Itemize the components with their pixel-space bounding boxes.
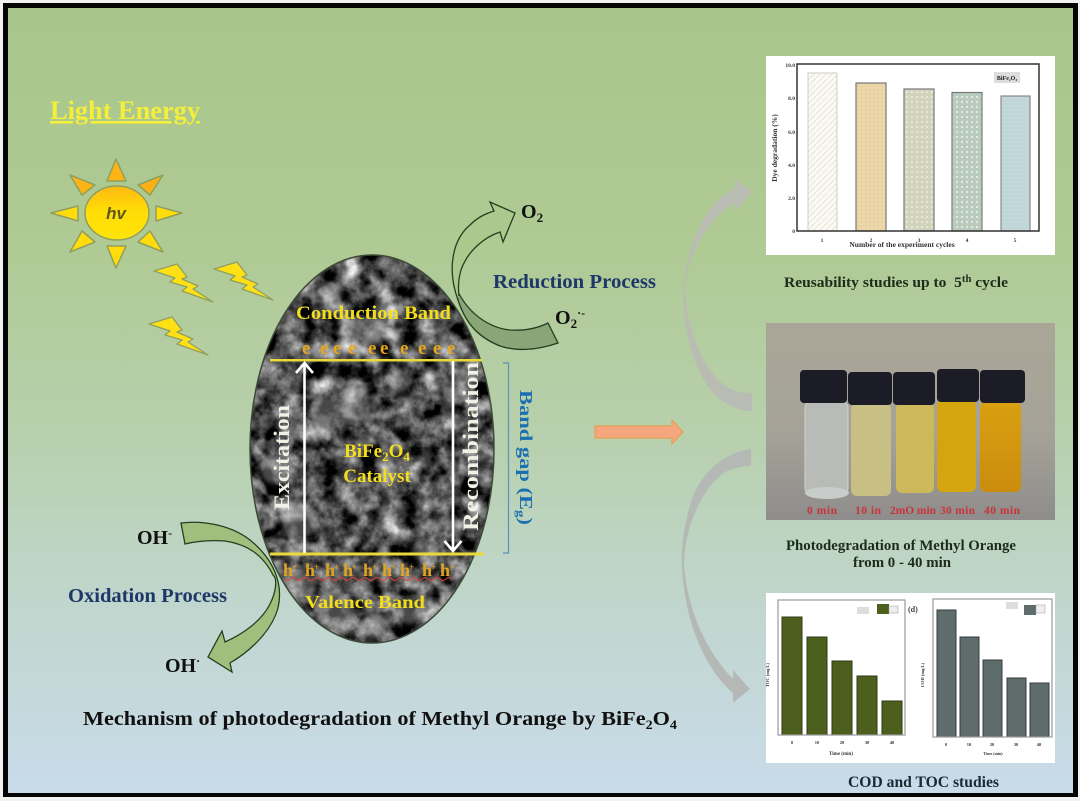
bar chart: dye degradation by cycle: Number of the experiment cycles	[849, 240, 955, 249]
bar chart: TOC: 40	[890, 740, 895, 745]
vial 40 min	[980, 370, 1025, 492]
label: BiFe2O4 Catalyst: 2	[382, 449, 389, 464]
electrons row: eeeeeeeeee	[302, 338, 455, 359]
caption: photodegradation	[786, 538, 1017, 571]
label: O2 radical: ·-	[577, 306, 585, 320]
bar chart: TOC: 10	[815, 740, 820, 745]
caption: reusability: th	[962, 274, 972, 285]
holes row: hhhhhhhhh	[283, 560, 450, 580]
vial 30 min	[937, 369, 979, 492]
bar chart: COD: 0	[945, 742, 948, 747]
bar chart: TOC: Time (min)	[829, 752, 853, 757]
caption: COD and TOC: COD and TOC studies	[848, 774, 999, 791]
icon: sun: hv	[106, 204, 127, 223]
panel: TOC and COD charts	[765, 593, 1055, 763]
label: O2: 2	[537, 210, 543, 225]
vial time labels: 2mO min	[890, 505, 937, 517]
caption: reusability: cycle	[971, 275, 1009, 291]
bar chart: dye degradation by cycle: Dye degradation (%)	[770, 114, 779, 182]
vial time labels: 30 min	[940, 505, 976, 517]
bar chart: dye degradation by cycle: 6.0	[788, 130, 795, 136]
arrow: grey to reusability chart	[683, 179, 752, 411]
caption: reusability: Reusability studies up to 5	[784, 275, 950, 291]
icon: sun	[51, 159, 182, 268]
conduction band line	[270, 359, 482, 362]
label: Oxidation Process: Oxidation Process	[68, 586, 227, 607]
bar chart: COD: 30	[1014, 742, 1019, 747]
icon: lightning bolt 1	[154, 264, 213, 302]
panel: reusability chart	[766, 56, 1055, 255]
label: BiFe2O4 Catalyst: O	[389, 441, 403, 462]
label: OH radical: OH	[165, 655, 196, 677]
label: Conduction Band: Conduction Band	[296, 304, 452, 324]
bar chart: dye degradation by cycle: 3	[918, 238, 921, 244]
icon: lightning bolt 3	[149, 317, 208, 355]
caption: photodegradation: Photodegradation of Methyl Orange	[786, 538, 1017, 554]
label: Band gap: Band gap (E	[516, 390, 536, 486]
bar chart: COD: Time (min)	[983, 751, 1003, 756]
label: OH radical: ·	[196, 654, 200, 668]
label: O2 radical: O	[555, 307, 571, 329]
arrow: recombination	[444, 361, 462, 551]
arrow: grey to COD TOC charts	[682, 449, 751, 703]
title: mechanism caption: O	[653, 708, 670, 730]
bar chart: dye degradation by cycle: 2	[870, 238, 873, 244]
bar chart: dye degradation by cycle: BiFe₂O₄	[997, 76, 1017, 82]
SEM micrograph oval	[250, 255, 495, 645]
holes row: +++++++++	[292, 562, 454, 572]
label: BiFe2O4 Catalyst	[343, 441, 411, 487]
bar chart: TOC: 30	[865, 740, 870, 745]
label: O2: O	[521, 201, 537, 223]
bar chart: TOC	[765, 600, 918, 757]
bar chart: TOC: TOC (mg/L)	[765, 662, 770, 687]
icon: lightning bolt 2	[214, 262, 273, 300]
title: mechanism caption: 4	[670, 717, 678, 732]
label: OH- top: -	[168, 526, 172, 540]
arrow: excitation	[296, 363, 313, 553]
title: mechanism caption: 2	[646, 717, 653, 732]
band gap bracket	[503, 363, 508, 553]
label: Band gap: g	[514, 510, 528, 518]
vial 10 min	[848, 372, 892, 496]
vial time labels: 0 min	[807, 505, 838, 517]
bar chart: TOC: 0	[791, 740, 794, 745]
arrow: reduction lower crescent	[458, 292, 558, 349]
bar chart: COD: 20	[990, 742, 995, 747]
heading: Light Energy: Light Energy	[50, 96, 200, 125]
vial 0 min	[800, 370, 849, 499]
vial 20 min	[893, 372, 935, 493]
bar chart: dye degradation by cycle: 1	[821, 238, 824, 244]
arrow: orange central	[595, 420, 683, 444]
bar chart: COD	[920, 599, 1052, 756]
arrow: reduction upper arrow to O2	[452, 202, 515, 300]
bar chart: COD: 10	[967, 742, 972, 747]
catalyst oval with band diagram	[250, 255, 495, 645]
label: Recombination: Recombination	[458, 362, 483, 531]
bar chart: TOC: 20	[840, 740, 845, 745]
bar chart: dye degradation by cycle: 0	[792, 229, 795, 235]
label: Valence Band: Valence Band	[305, 592, 425, 612]
label: Reduction Process: Reduction Process	[493, 272, 656, 293]
vial time labels: 10 in	[855, 505, 882, 517]
panel: vial photo	[766, 323, 1055, 520]
label: BiFe2O4 Catalyst: BiFe	[344, 441, 382, 462]
bar chart: dye degradation by cycle: 10.0	[785, 63, 795, 69]
arrow: oxidation	[181, 522, 280, 672]
vial time labels	[807, 505, 1021, 517]
bar chart: dye degradation by cycle: 5	[1014, 238, 1017, 244]
bar chart: dye degradation by cycle: 4.0	[788, 163, 795, 169]
label: BiFe2O4 Catalyst: Catalyst	[343, 466, 411, 487]
label: OH- top: OH	[137, 527, 168, 549]
bar chart: TOC: (d)	[908, 605, 918, 614]
label: Band gap: )	[515, 518, 536, 525]
label: O2 radical: 2	[571, 316, 577, 331]
caption: photodegradation: from 0 - 40 min	[853, 555, 951, 571]
bar chart: dye degradation by cycle: 8.0	[788, 96, 795, 102]
bar chart: COD: 40	[1037, 742, 1042, 747]
bar chart: dye degradation by cycle	[770, 63, 1039, 249]
bar chart: COD: COD (mg/L)	[920, 662, 925, 687]
valence band line	[270, 552, 484, 556]
bar chart: dye degradation by cycle: 2.0	[788, 196, 795, 202]
label: Excitation: Excitation	[269, 405, 294, 510]
label: BiFe2O4 Catalyst: 4	[403, 449, 410, 464]
bar chart: dye degradation by cycle: 4	[966, 238, 969, 244]
title: mechanism caption: Mechanism of photodegradation of Methyl Orange by BiFe	[83, 708, 602, 730]
vial time labels: 40 min	[984, 505, 1021, 517]
